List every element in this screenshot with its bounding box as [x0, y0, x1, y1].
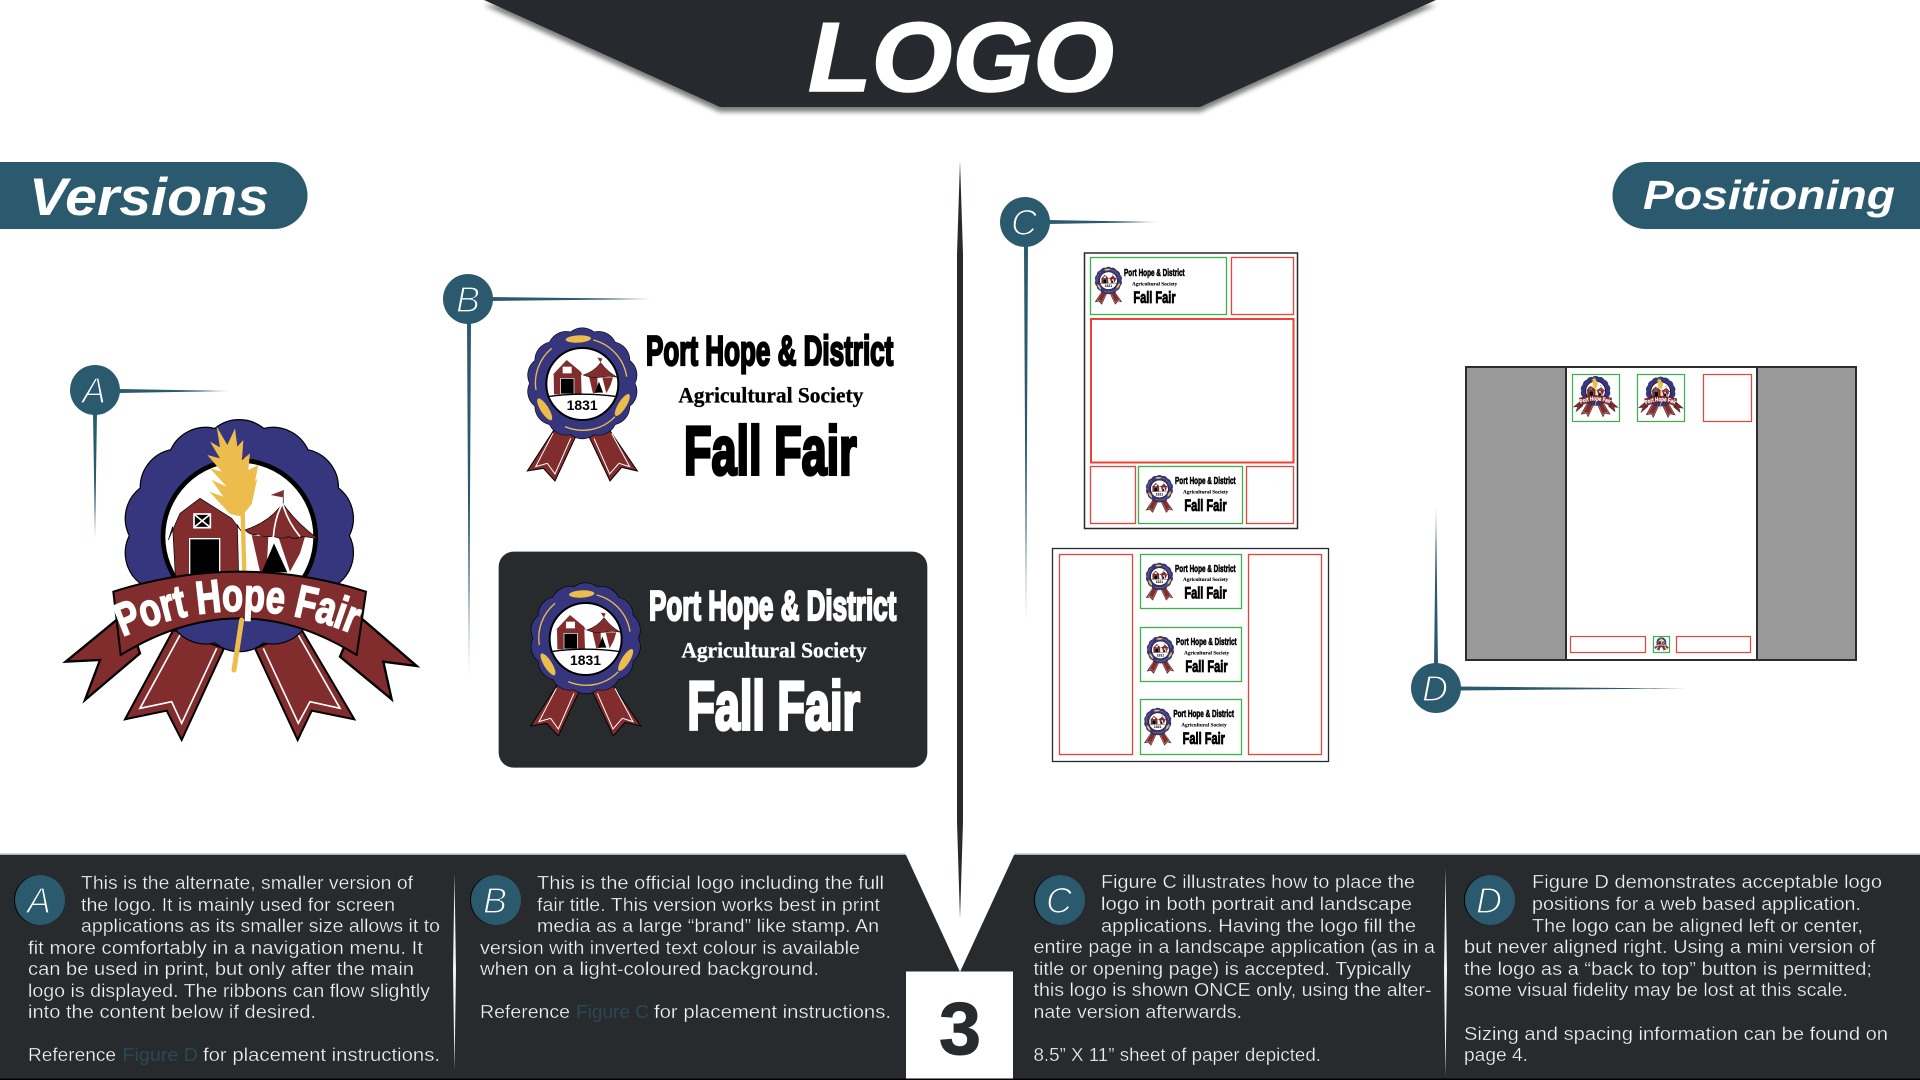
web layout: left logo	[1573, 376, 1618, 418]
description D: page 4.	[1464, 1044, 1528, 1065]
portrait sheet: bottom logo: Fall Fair	[1184, 496, 1227, 515]
figure D marker: D	[1422, 668, 1448, 709]
figure B: official logo on white: Port Hope & District	[646, 327, 893, 374]
description A: logo is displayed. The ribbons can flow slightly	[28, 980, 431, 1001]
divider C/D	[1444, 868, 1447, 1077]
figure B: inverted logo on dark panel: 1831	[570, 652, 601, 668]
bottom description panel	[0, 854, 1920, 1080]
description C: 8.5” X 11” sheet of paper depicted.	[1034, 1044, 1321, 1065]
figure A: alternate logo: Port Hope Fair	[114, 579, 362, 637]
description A: A	[25, 880, 51, 921]
portrait sheet: bottom logo	[1146, 475, 1236, 515]
description C: title or opening page) is accepted. Typically	[1034, 958, 1412, 979]
description C	[1034, 871, 1436, 1065]
portrait sheet: top logo: Agricultural Society	[1132, 281, 1178, 287]
description D: positions for a web based application.	[1532, 893, 1861, 914]
figure C: landscape sheet	[1052, 548, 1328, 762]
landscape sheet: logo three: Agricultural Society	[1181, 722, 1227, 728]
heading: Positioning	[1612, 162, 1920, 229]
landscape sheet: logo one: Port Hope & District	[1175, 564, 1236, 575]
description A: applications as its smaller size allows it to	[81, 915, 440, 936]
landscape sheet: logo one: Agricultural Society	[1183, 577, 1229, 583]
landscape sheet: logo one: 1831	[1156, 580, 1163, 584]
web layout: center logo	[1638, 376, 1684, 418]
portrait sheet: top logo: Fall Fair	[1133, 288, 1176, 307]
page number box: 3	[939, 987, 981, 1070]
figure D: web page layout	[1466, 367, 1856, 660]
description A: Figure D	[122, 1044, 198, 1065]
description A: the logo. It is mainly used for screen	[81, 894, 395, 915]
description B: B	[483, 880, 507, 921]
figure A marker: A	[80, 370, 106, 411]
description A: can be used in print, but only after the main	[28, 958, 414, 979]
figure B: inverted logo on dark panel: Fall Fair	[687, 668, 860, 744]
figure C marker: C	[1011, 202, 1038, 243]
description C: Figure C illustrates how to place the	[1101, 871, 1415, 892]
heading: Versions: Versions	[29, 168, 269, 227]
title banner	[484, 0, 1436, 112]
description D	[1464, 871, 1888, 1065]
description B: version with inverted text colour is available	[480, 937, 860, 958]
description B: media as a large “brand” like stamp. An	[537, 915, 879, 936]
figure A marker	[70, 365, 230, 540]
page number box	[906, 972, 1013, 1078]
description D: some visual fidelity may be lost at this scale.	[1464, 979, 1848, 1000]
description C: nate version afterwards.	[1034, 1001, 1242, 1022]
description C: this logo is shown ONCE only, using the alter-	[1034, 979, 1432, 1000]
description C: entire page in a landscape application (as in a	[1034, 936, 1436, 957]
description D: Figure D demonstrates acceptable logo	[1532, 871, 1882, 892]
figure B: official logo on white: Fall Fair	[684, 413, 857, 489]
description B: This is the official logo including the full	[537, 872, 884, 893]
web layout: left logo: Port Hope Fair	[1580, 396, 1612, 404]
landscape sheet: logo one	[1146, 563, 1236, 603]
portrait sheet: bottom logo: 1831	[1156, 492, 1163, 496]
description B: Reference	[480, 1001, 570, 1022]
figure C: portrait sheet	[1084, 253, 1298, 528]
description D: Sizing and spacing information can be found on	[1464, 1023, 1888, 1044]
figure B: official logo on white: 1831	[567, 397, 598, 413]
title text: LOGO	[808, 2, 1114, 112]
figure B: official logo on white: Agricultural Society	[678, 383, 863, 408]
portrait sheet: bottom logo: Agricultural Society	[1183, 489, 1229, 495]
description B: for placement instructions.	[654, 1001, 891, 1022]
portrait sheet: top logo: 1831	[1105, 284, 1112, 288]
description D: the logo as a “back to top” button is permitted;	[1464, 958, 1872, 979]
web layout: mini back-to-top logo: Port Hope Fair	[1656, 644, 1667, 646]
landscape sheet: logo three: Fall Fair	[1183, 729, 1225, 748]
description A: into the content below if desired.	[28, 1001, 316, 1022]
landscape sheet: logo three: Port Hope & District	[1173, 709, 1234, 720]
figure B: inverted logo on dark panel	[499, 552, 927, 768]
landscape sheet: logo three: 1831	[1154, 725, 1162, 729]
figure B marker: B	[456, 279, 480, 320]
landscape sheet: logo two: Port Hope & District	[1176, 637, 1237, 648]
portrait sheet: bottom logo: Port Hope & District	[1175, 476, 1236, 487]
description D: but never aligned right. Using a mini version of	[1464, 936, 1876, 957]
figure B: inverted logo on dark panel: Agricultural Society	[681, 638, 867, 663]
description A: fit more comfortably in a navigation menu. It	[28, 937, 424, 958]
description A: This is the alternate, smaller version of	[81, 872, 414, 893]
figure B: inverted logo on dark panel: Port Hope & District	[649, 582, 896, 629]
description B: fair title. This version works best in print	[537, 894, 881, 915]
description B: Figure C	[576, 1001, 649, 1022]
description D: D	[1476, 880, 1502, 921]
description B: when on a light-coloured background.	[479, 958, 819, 979]
description C: logo in both portrait and landscape	[1101, 893, 1412, 914]
portrait sheet: top logo: Port Hope & District	[1124, 268, 1185, 279]
web layout: mini back-to-top logo	[1654, 637, 1669, 651]
figure D marker	[1411, 506, 1687, 713]
center divider	[957, 161, 963, 919]
heading: Positioning: Positioning	[1643, 172, 1895, 218]
description C: applications. Having the logo fill the	[1101, 915, 1416, 936]
landscape sheet: logo two: Fall Fair	[1185, 657, 1228, 676]
description A	[14, 872, 440, 1065]
description A: for placement instructions.	[203, 1044, 440, 1065]
landscape sheet: logo three	[1144, 708, 1234, 748]
divider A/B	[453, 873, 456, 1070]
description C: C	[1046, 880, 1073, 921]
description D: The logo can be aligned left or center,	[1532, 915, 1863, 936]
description A: Reference	[28, 1044, 116, 1065]
landscape sheet: logo two	[1147, 636, 1237, 676]
landscape sheet: logo two: 1831	[1157, 653, 1164, 657]
landscape sheet: logo one: Fall Fair	[1184, 584, 1227, 603]
portrait sheet: top logo	[1095, 267, 1185, 307]
web layout: center logo: Port Hope Fair	[1644, 397, 1676, 404]
figure B: official logo on white	[527, 327, 893, 489]
landscape sheet: logo two: Agricultural Society	[1184, 650, 1230, 656]
description B	[470, 872, 891, 1022]
heading: Versions	[0, 162, 308, 229]
figure A: alternate logo	[62, 419, 420, 742]
figure C marker	[1000, 197, 1158, 625]
figure B marker	[443, 274, 652, 678]
